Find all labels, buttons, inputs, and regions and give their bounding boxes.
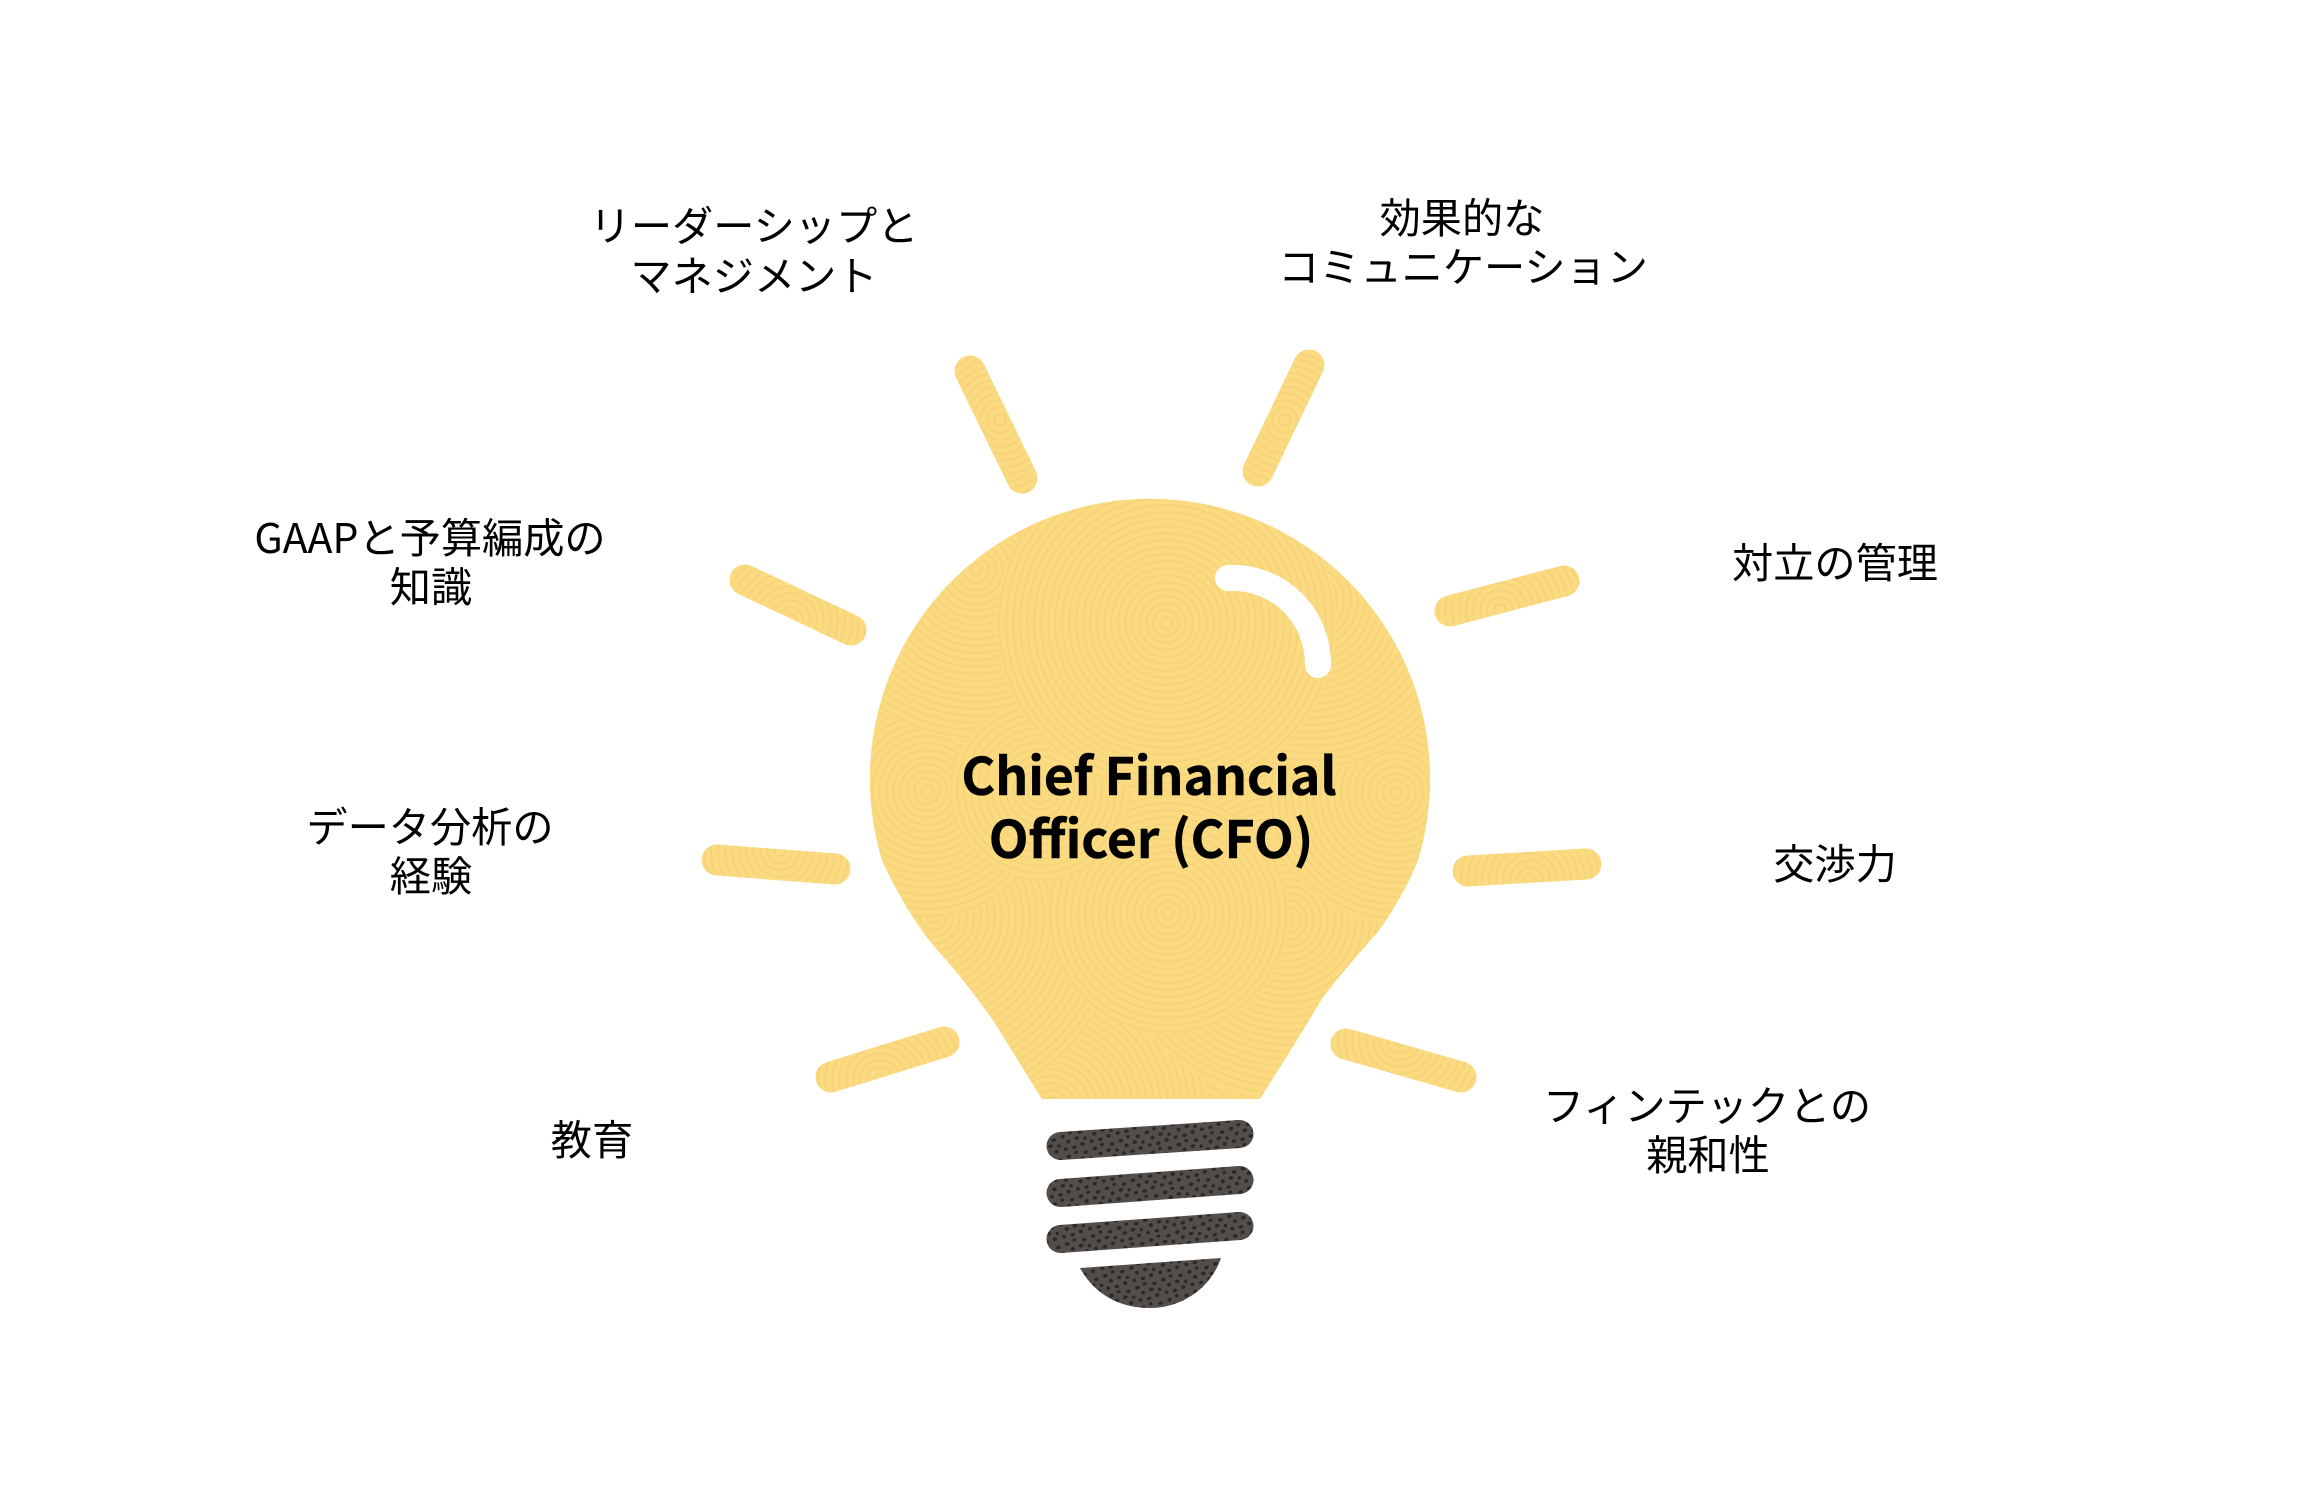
bulb title	[961, 735, 1337, 873]
label: GAAP and budgeting knowledge: GAAPと予算編成の	[254, 505, 606, 565]
label: conflict management: 対立の管理	[1732, 530, 1938, 590]
label: data analysis experience	[306, 794, 554, 903]
label: fintech affinity	[1543, 1073, 1871, 1182]
label: data analysis experience: 経験	[390, 843, 472, 903]
ray: middle right	[1468, 864, 1586, 871]
label: effective communication	[1278, 185, 1648, 294]
label: fintech affinity: フィンテックとの	[1543, 1073, 1871, 1133]
label: GAAP and budgeting knowledge: 知識	[390, 554, 472, 614]
ray: lower left	[831, 1042, 944, 1077]
label: data analysis experience: データ分析の	[306, 794, 554, 854]
label: leadership and management: リーダーシップと	[590, 193, 918, 253]
bulb title: Officer (CFO)	[989, 798, 1313, 873]
ray: top right	[1258, 365, 1309, 471]
label: GAAP and budgeting knowledge	[254, 505, 606, 614]
label: education: 教育	[551, 1107, 633, 1167]
rays of light	[717, 365, 1586, 1077]
label: leadership and management: マネジメント	[630, 243, 878, 303]
label: negotiation: 交渉力	[1773, 831, 1897, 891]
lightbulb diagram	[256, 198, 1937, 1308]
label: effective communication: コミュニケーション	[1278, 234, 1648, 294]
ray: upper left	[745, 580, 851, 630]
ray: middle left	[717, 860, 835, 869]
bulb highlight	[1228, 578, 1318, 665]
bulb title: Chief Financial	[961, 735, 1337, 810]
label: leadership and management	[590, 193, 918, 303]
ray: lower right	[1346, 1044, 1461, 1077]
ray: upper right	[1450, 581, 1564, 611]
label: fintech affinity: 親和性	[1646, 1122, 1770, 1182]
ray: top left	[970, 371, 1022, 478]
bulb screw base	[1060, 1134, 1240, 1308]
bulb glass	[870, 498, 1430, 1099]
label: effective communication: 効果的な	[1380, 185, 1544, 245]
